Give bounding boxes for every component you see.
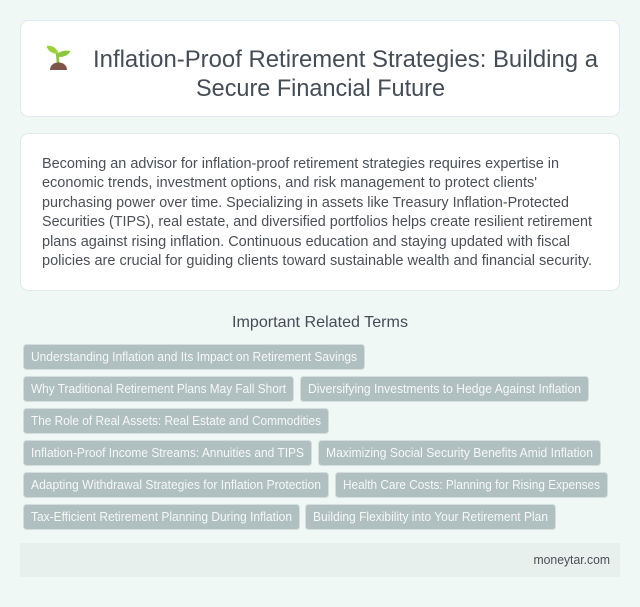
tag: Adapting Withdrawal Strategies for Inflation Protection (31, 478, 321, 492)
icon: seedling (46, 46, 70, 70)
tag: Diversifying Investments to Hedge Against Inflation (308, 382, 581, 396)
tag: Inflation-Proof Income Streams: Annuities and TIPS (31, 446, 304, 460)
footer (20, 543, 620, 577)
panel: description (20, 134, 620, 290)
tag: Health Care Costs: Planning for Rising Expenses (343, 478, 600, 492)
tag (318, 440, 600, 466)
tag (24, 504, 300, 530)
text block: description: policies are crucial for guiding clients toward sustainable wealth and financial security. (42, 252, 592, 269)
tag: Why Traditional Retirement Plans May Fall Short (31, 382, 286, 396)
panel: related term tags (24, 344, 608, 530)
tag: Understanding Inflation and Its Impact on Retirement Savings (31, 350, 357, 364)
heading: related terms: Important Related Terms (232, 314, 408, 331)
tag (24, 440, 312, 466)
text block: description: purchasing power over time. Specializing in assets like Treasury Inflation-Protected (42, 194, 569, 211)
tag (24, 344, 364, 370)
text block: description (42, 155, 593, 269)
tag: The Role of Real Assets: Real Estate and Commodities (31, 414, 321, 428)
title: Secure Financial Future (196, 75, 445, 102)
tag (24, 408, 328, 434)
tag (300, 376, 588, 402)
title (93, 46, 599, 102)
text block: description: Securities (TIPS), real estate, and diversified portfolios helps create resilient retirement (42, 213, 593, 230)
panel: title card (20, 20, 620, 116)
text block: description: plans against rising inflation. Continuous education and staying updated with fiscal (42, 233, 570, 250)
tag: Building Flexibility into Your Retirement Plan (313, 510, 548, 524)
tag (24, 472, 328, 498)
tag (336, 472, 608, 498)
tag (24, 376, 294, 402)
text block: description: Becoming an advisor for inflation-proof retirement strategies requires expertise in (42, 155, 559, 172)
title: Inflation-Proof Retirement Strategies: Building a (93, 46, 599, 73)
text block: description: economic trends, investment options, and risk management to protect clients' (42, 174, 537, 191)
tag: Maximizing Social Security Benefits Amid Inflation (326, 446, 593, 460)
tag (306, 504, 556, 530)
tag: Tax-Efficient Retirement Planning During Inflation (31, 510, 292, 524)
footer: moneytar.com (534, 553, 610, 567)
